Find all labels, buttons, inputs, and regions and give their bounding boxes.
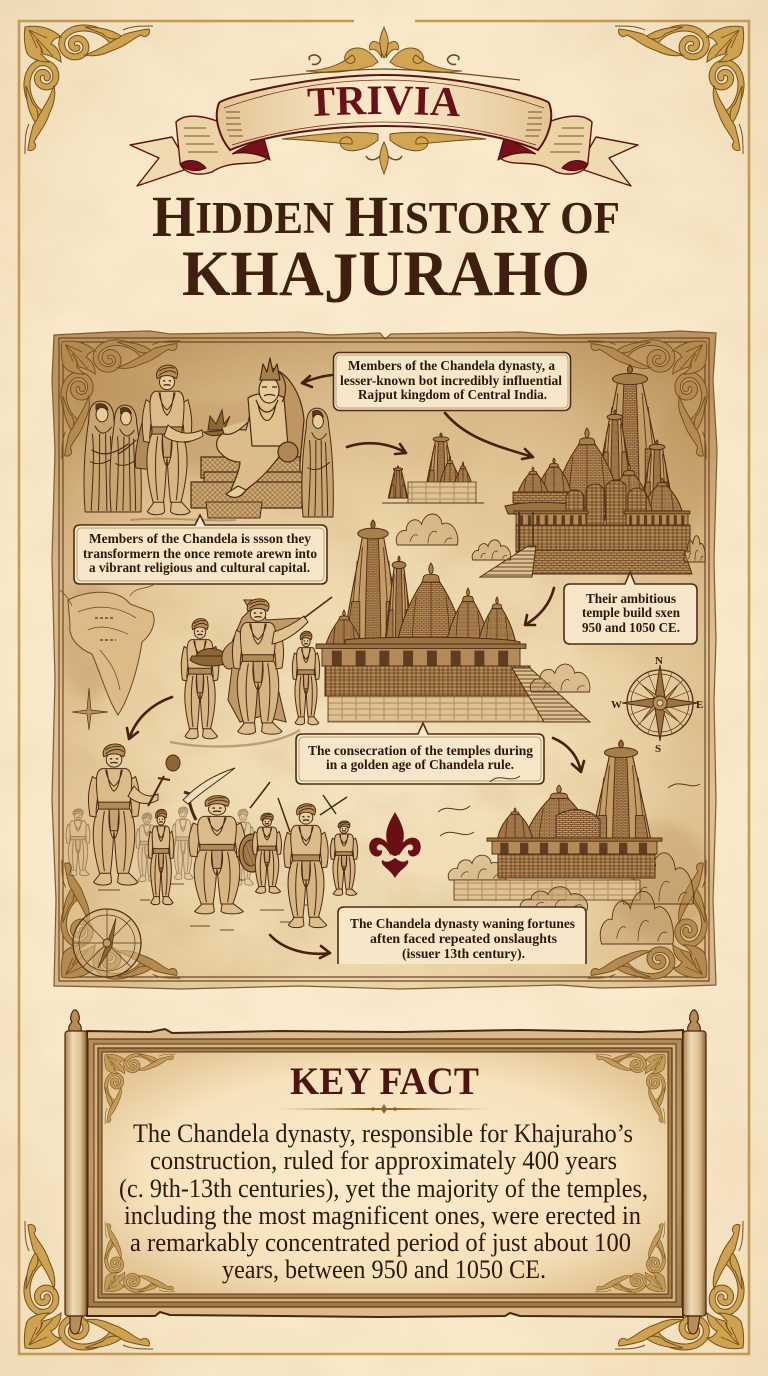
title: Khajuraho: KHA — [182, 238, 330, 310]
banner main band — [217, 75, 551, 150]
banner right tail — [578, 137, 638, 186]
map of India — [60, 584, 155, 715]
lower banner ornament — [282, 132, 486, 174]
callout: building years: temple build sxen — [582, 606, 680, 621]
compass rose: north-east: N — [655, 655, 663, 667]
callout: king's dynasty — [334, 352, 570, 410]
scroll frame rings — [88, 1039, 682, 1307]
key fact divider — [278, 1104, 490, 1114]
background soldiers — [66, 807, 254, 885]
callout: consecration: in a golden age of Chandela rule. — [326, 758, 514, 773]
map corner ornaments — [61, 341, 707, 978]
red floral ornament — [369, 812, 421, 878]
large temple piers — [566, 480, 646, 530]
callout: consecration — [296, 723, 544, 784]
callout: king's dynasty: lesser-known bot incredibly influential — [340, 374, 562, 389]
compass rose: north-east: W — [611, 699, 622, 711]
callout: transformation: Members of the Chandela is ssson they — [89, 532, 311, 547]
right roller — [683, 1010, 706, 1334]
scene: priest and royal patron — [170, 597, 332, 746]
key fact body text: The Chandela dynasty, responsible for Khajuraho’s — [133, 1119, 633, 1148]
scene: warriors in battle — [66, 744, 358, 930]
callout: waning fortunes: The Chandela dynasty waning fortunes — [350, 917, 576, 932]
large temple railing and roof — [513, 492, 580, 503]
key fact body text: a remarkably concentrated period of just about 100 — [130, 1228, 631, 1257]
arrow: callout to large temple — [445, 413, 533, 459]
large temple — [472, 365, 705, 577]
offering bowl — [204, 410, 230, 436]
title: Khajuraho: J — [324, 238, 358, 318]
arrow: battle to waning callout — [270, 935, 330, 958]
ground shadow — [130, 519, 236, 520]
title: Hidden History of: IDDEN — [195, 193, 345, 243]
key fact body text: years, between 950 and 1050 CE. — [222, 1255, 546, 1284]
attendant women — [84, 401, 141, 512]
callout: king's dynasty: Members of the Chandela dynasty, a — [348, 359, 555, 374]
key fact body text: including the most magnificent ones, were erected in — [124, 1201, 641, 1230]
scene: king receiving an offering — [84, 358, 333, 520]
central temple — [316, 520, 590, 722]
banner left fold — [176, 116, 268, 174]
food tray — [190, 648, 232, 666]
courtier with turban — [135, 365, 203, 515]
callout: building years: 950 and 1050 CE. — [582, 621, 680, 636]
callout: transformation: a vibrant religious and cultural capital. — [89, 561, 310, 576]
callout: king's dynasty: Rajput kingdom of Central India. — [358, 388, 547, 403]
panel: key fact scroll — [65, 1010, 706, 1334]
map aged stains — [60, 380, 710, 940]
key fact body text — [119, 1119, 648, 1284]
callout: transformation — [74, 515, 327, 584]
corner ornament: top left — [24, 26, 153, 154]
callout: building years — [564, 572, 697, 644]
arrow: callout to king — [302, 375, 332, 387]
warrior with mace — [88, 744, 180, 885]
key fact body text: construction, ruled for approximately 400 years — [150, 1146, 617, 1175]
key fact body text: (c. 9th-13th centuries), yet the majority of the temples, — [119, 1174, 648, 1203]
scroll inner paper — [102, 1052, 668, 1294]
corner ornament: top right — [615, 26, 744, 154]
warrior with sword, right — [278, 795, 347, 928]
far temple sketch — [382, 433, 484, 545]
compass rose: north-east: E — [696, 699, 703, 711]
title: Hidden History of: H — [152, 184, 195, 249]
round shield — [239, 834, 265, 872]
banner title text: TRIVIA — [307, 86, 460, 116]
sword warrior — [183, 768, 245, 914]
compass dial: lower left — [73, 909, 141, 977]
arrow: patron to battle — [127, 697, 172, 739]
title: Hidden History of: ISTORY OF — [388, 193, 620, 243]
top crest ornament — [250, 27, 520, 80]
title: Hidden History of: H — [345, 184, 388, 249]
footstool — [206, 502, 262, 518]
callout: waning fortunes: aften faced repeated onslaughts — [370, 932, 558, 947]
title: Khajuraho: URAHO — [358, 238, 590, 310]
banner left tail — [130, 137, 190, 186]
star mark — [72, 688, 108, 730]
banner dark red undersides — [180, 138, 588, 171]
corner ornament: bottom left — [24, 1221, 153, 1349]
large temple stairs — [480, 546, 536, 577]
ground dashes — [98, 880, 310, 930]
arrow: temple to central temple — [525, 588, 554, 625]
throne steps — [191, 368, 304, 508]
arrow: consecration to lower temple — [553, 738, 584, 772]
key fact heading: KEY FACT — [290, 1060, 479, 1103]
banner ribbon with TRIVIA — [129, 74, 639, 187]
banner right fold — [500, 116, 592, 174]
left roller — [65, 1010, 87, 1334]
callout: waning fortunes — [338, 907, 586, 964]
corner ornament: bottom right — [615, 1221, 744, 1349]
arrow: king to far temple — [347, 443, 406, 454]
callout: waning fortunes: (issuer 13th century). — [402, 947, 525, 962]
callout: transformation: transformern the once remote arewn into — [83, 547, 317, 562]
seated king — [217, 358, 298, 497]
panel: illustrated parchment map — [52, 331, 717, 989]
key fact inner corner ornaments — [105, 1054, 665, 1292]
soldier, right — [330, 821, 358, 895]
callout: building years: Their ambitious — [586, 592, 677, 607]
central temple plinth — [328, 696, 548, 722]
small figure — [148, 809, 174, 905]
compass rose: north-east — [611, 655, 703, 755]
lower right temple — [438, 740, 700, 944]
callout: consecration: The consecration of the temples during — [308, 744, 533, 759]
swordsman background — [250, 782, 281, 893]
scroll parchment edge — [87, 1029, 683, 1317]
queen — [302, 408, 333, 517]
central temple stairs — [512, 668, 590, 722]
compass rose: north-east: S — [655, 743, 661, 755]
